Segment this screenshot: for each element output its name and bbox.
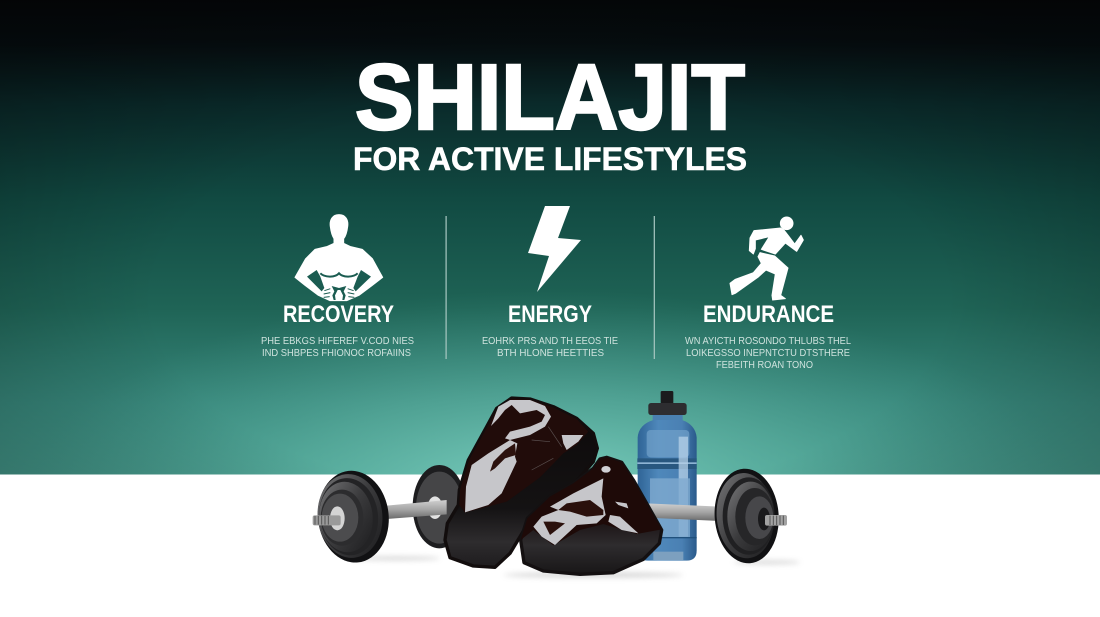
background: teal gradient panel	[0, 0, 1100, 474]
text: endurance description: FEBEITH ROAN TONO	[716, 360, 813, 371]
heading: energy: ENERGY	[508, 301, 592, 328]
text: recovery description	[261, 336, 414, 359]
floor shadows	[353, 556, 800, 578]
dumbbell left bar	[387, 500, 447, 519]
text: energy description: BTH HLONE HEETTIES	[497, 348, 604, 359]
divider left	[446, 216, 447, 359]
text: endurance description: WN AYICTH ROSONDO THLUBS THEL	[685, 336, 851, 347]
divider right	[654, 216, 655, 359]
icon: lightning bolt	[528, 206, 581, 292]
rock: rear left	[445, 398, 597, 567]
dumbbell right weights	[711, 467, 787, 565]
text: energy description	[482, 336, 618, 359]
panel: recovery	[261, 215, 414, 359]
heading: endurance: ENDURANCE	[703, 301, 834, 328]
icon: runner	[730, 217, 803, 300]
text: recovery description: PHE EBKGS HIFEREF V.COD NIES	[261, 336, 414, 347]
dumbbell right bar	[647, 503, 720, 521]
text: recovery description: IND SHBPES FHIONOC ROFAIINS	[262, 348, 411, 359]
icon: muscular torso	[295, 215, 383, 301]
subtitle: FOR ACTIVE LIFESTYLES	[353, 141, 747, 177]
dumbbell left weights	[313, 467, 393, 566]
rock highlights	[491, 400, 551, 440]
product still life: dumbbells, bottle, rocks	[313, 391, 800, 578]
title: SHILAJIT	[355, 45, 745, 149]
rock: front right	[521, 457, 662, 574]
panel: energy	[482, 206, 618, 359]
text: energy description: EOHRK PRS AND TH EEOS TIE	[482, 336, 618, 347]
rock highlights	[533, 478, 606, 545]
text: endurance description	[685, 336, 851, 371]
heading: recovery: RECOVERY	[283, 301, 394, 328]
panel: endurance	[685, 217, 851, 371]
water bottle	[637, 391, 697, 561]
dumbbell back disc	[413, 465, 466, 548]
text: endurance description: LOIKEGSSO INEPNTCTU DTSTHERE	[686, 348, 850, 359]
